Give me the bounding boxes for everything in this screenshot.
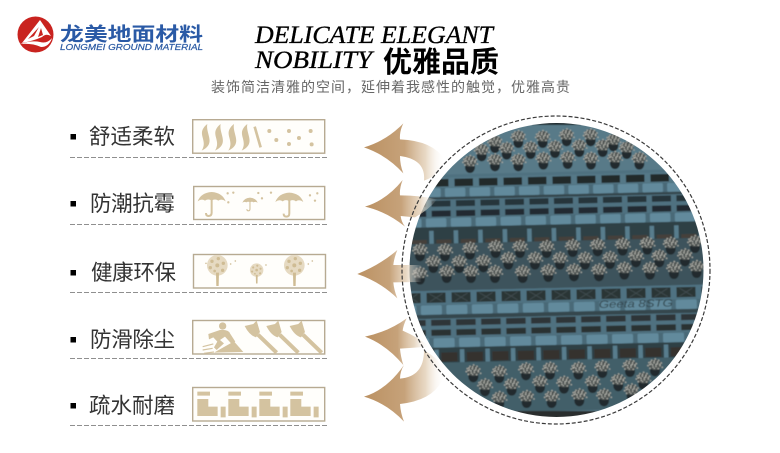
icon: slipping figure and brooms [193, 320, 325, 354]
divider [70, 424, 327, 426]
bullet [70, 403, 76, 408]
feature: 疏水耐磨 [70, 388, 327, 426]
title English line 2: NOBILITY [254, 47, 375, 74]
logo English name: LONGMEI GROUND MATERIAL [60, 43, 203, 52]
bullet [70, 134, 76, 140]
photo: doormat close-up in circle [410, 123, 704, 417]
icon: umbrellas [194, 186, 325, 220]
title English line 1: DELICATE ELEGANT [254, 22, 495, 49]
label: 防滑除尘 [90, 328, 175, 352]
bullet [70, 337, 76, 342]
dashed ring around the photo [402, 116, 710, 424]
feature: 防滑除尘 [70, 320, 327, 358]
icon: drainage blocks [193, 388, 325, 421]
feature: 健康环保 [70, 254, 327, 292]
logo Chinese name: 龙美地面材料 [60, 24, 203, 46]
bristle tufts [412, 128, 705, 285]
bullet [70, 270, 76, 276]
icon: trees [194, 254, 326, 288]
arrow 3 [357, 250, 422, 298]
title [254, 22, 499, 79]
bullet [70, 201, 76, 206]
arrow 4 [365, 318, 430, 365]
icon: soft fibres [193, 120, 325, 153]
label: 防潮抗霉 [90, 192, 175, 216]
subtitle: 装饰简洁清雅的空间，延伸着我感性的触觉，优雅高贵 [211, 79, 570, 95]
label: 健康环保 [91, 261, 176, 285]
logo [18, 16, 203, 52]
divider [70, 292, 327, 294]
printed mark on mat: Geeta 8STG [599, 297, 673, 311]
arrow 5 [364, 351, 445, 422]
feature: 舒适柔软 [70, 120, 327, 158]
divider [70, 156, 327, 158]
arrow 2 [365, 180, 437, 227]
title Chinese: 优雅品质 [383, 46, 499, 79]
divider [70, 224, 327, 226]
logo emblem [18, 16, 54, 52]
feature: 防潮抗霉 [70, 186, 327, 224]
divider [70, 358, 327, 360]
arrows pointing from the photo to the features [357, 123, 445, 422]
label: 舒适柔软 [89, 125, 175, 149]
arrow 1 [364, 123, 445, 181]
label: 疏水耐磨 [89, 394, 175, 418]
